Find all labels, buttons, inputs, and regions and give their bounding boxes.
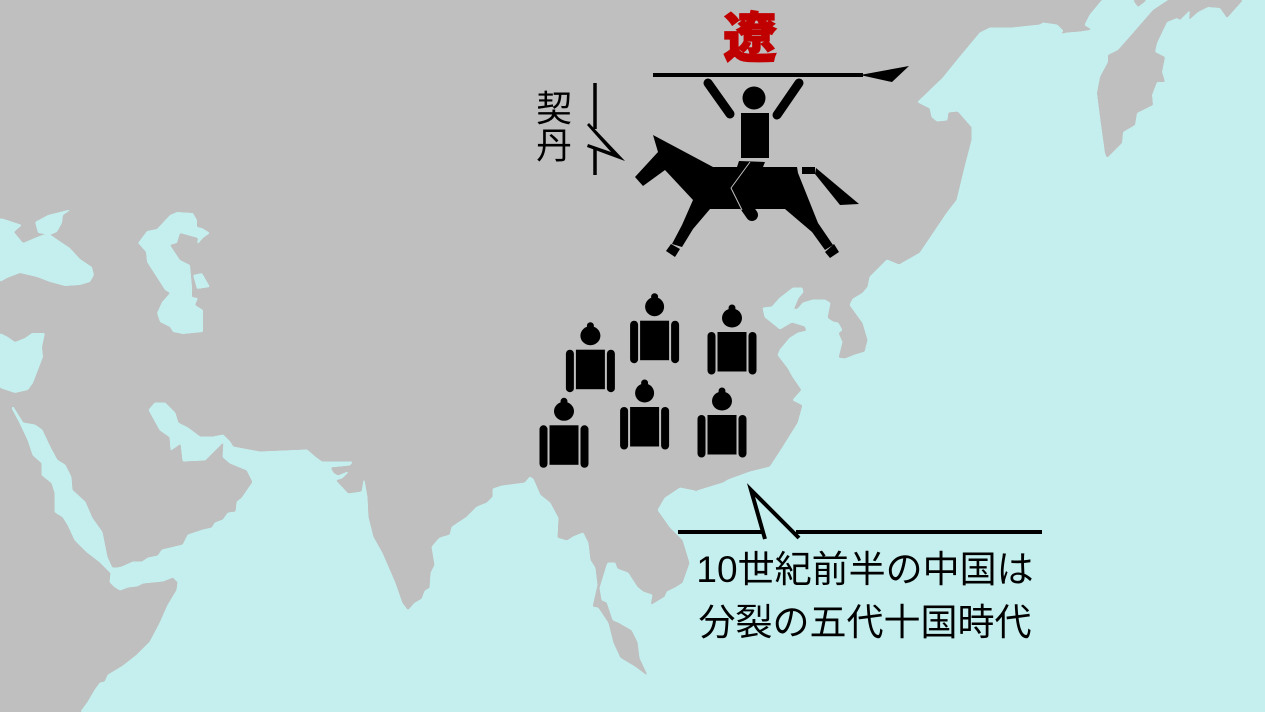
person 4 [620,380,669,450]
person 6 [540,398,588,468]
person 5 [698,388,746,458]
callout: China pointer line [678,490,1042,539]
text: China in early 10th century: 分裂の五代十国時代 [698,602,1032,643]
text: China in early 10th century: 10世紀前半の中国は [696,549,1034,590]
title: Liao: 遼 [723,9,777,69]
icon: mounted Khitan rider [635,83,859,258]
rider arms [708,83,799,115]
rider leg [731,162,752,215]
label: Khitan: 丹 [536,125,572,166]
horse hooves [666,244,839,258]
person 3 [566,322,615,392]
label: Khitan: 契 [536,88,572,129]
sea: Mediterranean [0,333,45,393]
person 2 [708,304,756,374]
sea: Black Sea [0,218,94,286]
horse body [635,135,833,250]
callout: Khitan pointer [587,83,625,175]
sea: Kara-Bogaz bay [193,273,210,289]
rider torso [741,113,769,158]
horse tail [802,167,859,205]
sea: Sea of Azov [35,209,72,235]
land: Sakhalin and Hokkaido region [1097,0,1243,158]
spear [653,66,909,82]
sea: Caspian Sea [138,212,210,334]
label: Khitan [536,88,572,166]
icons: divided Chinese states [540,293,756,468]
land: small northern sliver [1133,0,1147,7]
text: China in early 10th century [696,549,1034,643]
person 1 [630,293,679,363]
rider head [742,86,766,110]
